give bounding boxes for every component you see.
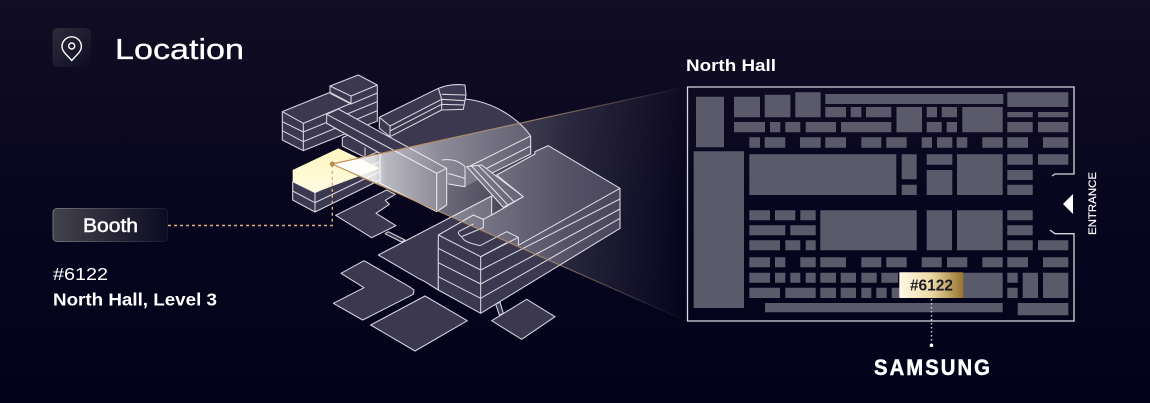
title: Location — [115, 34, 244, 66]
booth marker — [330, 162, 335, 166]
booth number label — [899, 272, 963, 298]
connector line: booth — [168, 165, 332, 226]
beam edges — [332, 87, 686, 321]
booth details: #6122 — [53, 264, 108, 284]
main hall building — [438, 146, 620, 313]
booth button: Booth — [83, 216, 138, 237]
floor plan frame — [688, 87, 1074, 321]
entrance label: ENTRANCE — [1087, 172, 1099, 235]
bridge and tower box — [327, 109, 447, 212]
floor plan heading: North Hall — [686, 56, 776, 75]
booth number label: #6122 — [910, 278, 953, 294]
entrance arrow — [1063, 194, 1073, 214]
booth details: North Hall, Level 3 — [53, 290, 217, 310]
top-left block — [282, 75, 377, 151]
highlighted booth block — [293, 148, 380, 212]
light beam — [332, 87, 686, 321]
curved wing — [379, 85, 466, 137]
booth details — [53, 264, 217, 310]
dome hall — [390, 99, 531, 207]
dotted leader to Samsung — [930, 299, 933, 347]
icon: location pin — [52, 28, 91, 67]
booth button — [53, 208, 168, 242]
Samsung wordmark: SAMSUNG — [874, 356, 990, 380]
floor plan booths — [694, 92, 1068, 315]
isometric venue map — [282, 75, 620, 351]
small block — [342, 132, 378, 157]
floor plates — [333, 190, 555, 351]
